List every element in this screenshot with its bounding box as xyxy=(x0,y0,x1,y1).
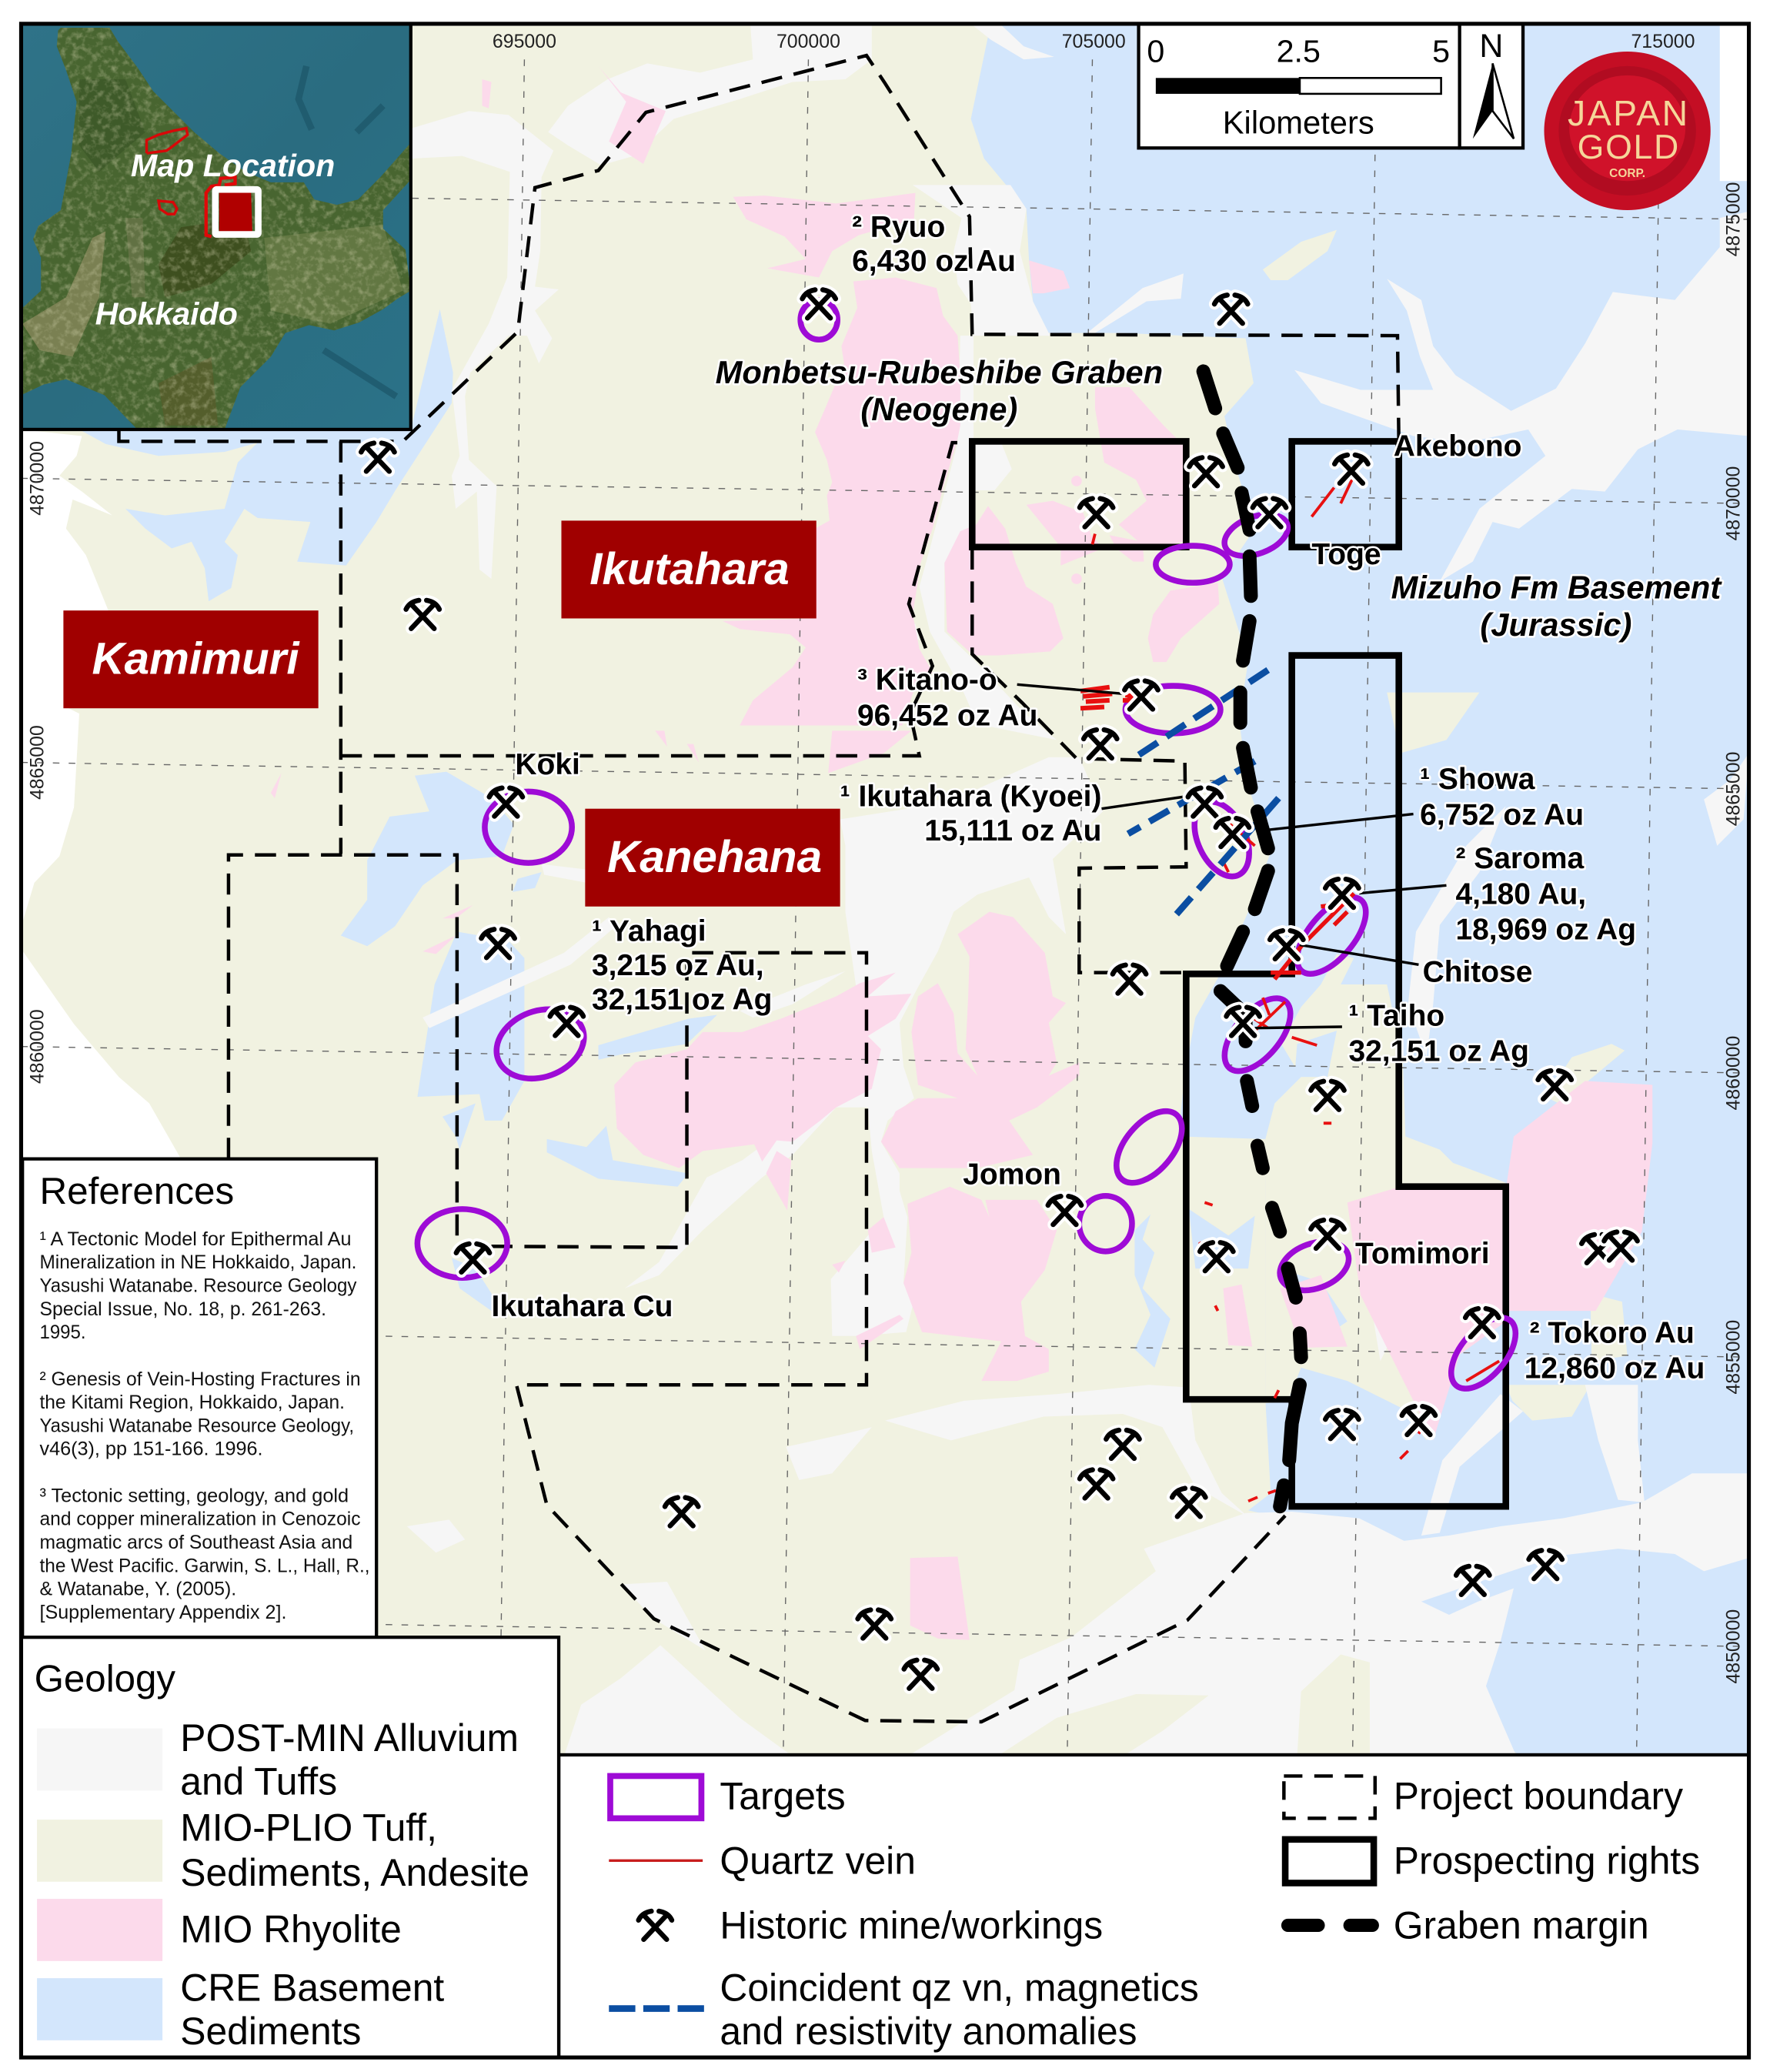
prospect labels: 32,151 oz Ag xyxy=(1348,1035,1529,1068)
grid coordinate labels: 4860000 xyxy=(27,1009,48,1084)
north arrow xyxy=(1460,24,1523,148)
panel: references: the West Pacific. Garwin, S. L., Hall, R., xyxy=(39,1555,370,1576)
geological unit labels: Monbetsu-Rubeshibe Graben xyxy=(716,354,1163,390)
panel: references: Special Issue, No. 18, p. 261-263. xyxy=(39,1298,326,1320)
panel: references: [Supplementary Appendix 2]. xyxy=(39,1602,286,1623)
panel: symbol legend: Graben margin xyxy=(1394,1904,1649,1947)
panel: references: Yasushi Watanabe. Resource Geology xyxy=(39,1275,357,1297)
scale bar: 2.5 xyxy=(1277,34,1321,69)
basement sediments northwest xyxy=(79,309,453,601)
region name: Kamimuri xyxy=(63,610,319,708)
prospect labels: 3,215 oz Au, xyxy=(592,949,764,982)
panel: references: 1995. xyxy=(39,1322,86,1343)
geological unit labels: Mizuho Fm Basement xyxy=(1391,570,1722,606)
grid coordinate labels: 4870000 xyxy=(27,441,48,516)
panel: references xyxy=(22,1159,376,1640)
prospect labels: Ikutahara Cu xyxy=(492,1290,673,1323)
prospect labels: ¹ Yahagi xyxy=(592,914,706,947)
panel: references: ³ Tectonic setting, geology, and gold xyxy=(39,1485,349,1507)
alluvium and tuffs xyxy=(407,24,1749,1756)
panel: symbol legend: Project boundary xyxy=(1394,1774,1683,1817)
prospect labels: ² Saroma xyxy=(1455,842,1585,875)
grid coordinate labels: 4870000 xyxy=(1723,466,1745,541)
panel: symbol legend: Prospecting rights xyxy=(1394,1839,1700,1882)
prospect labels: 15,111 oz Au xyxy=(924,814,1101,847)
coincident anomalies xyxy=(1128,670,1278,920)
prospect labels: 12,860 oz Au xyxy=(1525,1352,1705,1385)
rhyolite xyxy=(271,66,1652,1640)
beige islands over basement xyxy=(1263,229,1627,1441)
panel: geology legend: Sediments, Andesite xyxy=(180,1851,529,1894)
panel: symbol legend: Quartz vein xyxy=(720,1839,916,1882)
panel: symbol legend xyxy=(559,1755,1749,2057)
prospect labels: Toge xyxy=(1311,538,1381,571)
panel: references: & Watanabe, Y. (2005). xyxy=(39,1579,236,1600)
prospect labels: 6,752 oz Au xyxy=(1420,798,1584,831)
scale bar: 0 xyxy=(1147,34,1164,69)
grid coordinate labels: 4855000 xyxy=(1723,1320,1745,1395)
panel: references: and copper mineralization in Cenozoic xyxy=(39,1509,361,1530)
panel: references: Yasushi Watanabe Resource Geology, xyxy=(39,1415,354,1437)
leader lines xyxy=(1017,684,1446,1028)
inset map: Hokkaido location: Hokkaido xyxy=(95,296,238,331)
panel: symbol legend: and resistivity anomalies xyxy=(720,2010,1137,2053)
logo: Japan Gold xyxy=(1544,52,1711,210)
scale bar: 5 xyxy=(1432,34,1450,69)
prospect labels: ¹ Showa xyxy=(1420,763,1535,796)
grid coordinate labels: 700000 xyxy=(776,31,840,52)
prospect labels: 32,151 oz Ag xyxy=(592,984,772,1017)
panel: geology legend: Sediments xyxy=(180,2010,361,2053)
panel: symbol legend: Historic mine/workings xyxy=(720,1904,1103,1947)
panel: geology legend: CRE Basement xyxy=(180,1966,444,2009)
graben margin xyxy=(1204,371,1301,1506)
region name: Kamimuri: Kamimuri xyxy=(92,634,300,684)
panel: references: References xyxy=(39,1170,234,1212)
geological unit labels: (Jurassic) xyxy=(1480,607,1631,643)
panel: references: magmatic arcs of Southeast Asia and xyxy=(39,1532,352,1553)
geological unit labels xyxy=(716,354,1722,643)
region name: Kanehana xyxy=(585,809,840,907)
grid coordinate labels: 4865000 xyxy=(27,725,48,800)
panel: geology legend: Geology xyxy=(35,1658,175,1700)
prospect labels: 18,969 oz Ag xyxy=(1455,914,1636,947)
prospect labels: ¹ Taiho xyxy=(1348,999,1444,1032)
grid coordinate labels: 4850000 xyxy=(1723,1609,1745,1684)
prospect labels: ³ Kitano-ò xyxy=(857,663,997,697)
north arrow: N xyxy=(1479,28,1503,65)
historic mines xyxy=(361,290,1638,1689)
panel: references: v46(3), pp 151-166. 1996. xyxy=(39,1439,263,1460)
grid coordinate labels: 695000 xyxy=(493,31,556,52)
panel: references: Mineralization in NE Hokkaido, Japan. xyxy=(39,1252,356,1273)
panel: geology legend: POST-MIN Alluvium xyxy=(180,1716,519,1760)
inset map: Hokkaido location: Map Location xyxy=(131,148,335,183)
white coast west xyxy=(21,429,181,1159)
scale bar xyxy=(1139,24,1460,148)
prospecting rights xyxy=(972,441,1506,1506)
panel: geology legend: MIO-PLIO Tuff, xyxy=(180,1806,437,1850)
region name: Ikutahara xyxy=(561,520,817,618)
panel: symbol legend: Coincident qz vn, magnetics xyxy=(720,1966,1199,2009)
region name: Kanehana: Kanehana xyxy=(607,832,822,882)
project boundaries xyxy=(119,55,1399,1722)
panel: geology legend: and Tuffs xyxy=(180,1760,337,1803)
geological unit labels: (Neogene) xyxy=(860,391,1017,427)
logo: Japan Gold: JAPAN xyxy=(1568,93,1690,133)
prospect labels: ¹ Ikutahara (Kyoei) xyxy=(840,780,1101,813)
prospect labels xyxy=(492,210,1705,1385)
prospect labels: Koki xyxy=(515,748,580,781)
region name: Ikutahara: Ikutahara xyxy=(589,544,790,594)
basement sediments west xyxy=(341,772,1171,1368)
panel: geology legend: MIO Rhyolite xyxy=(180,1908,402,1951)
grid coordinate labels xyxy=(27,31,1745,1684)
prospect labels: 6,430 oz Au xyxy=(852,245,1016,278)
grid coordinate labels: 705000 xyxy=(1062,31,1126,52)
grid coordinate labels: 715000 xyxy=(1631,31,1695,52)
logo: Japan Gold: GOLD xyxy=(1578,129,1680,166)
panel: references: ² Genesis of Vein-Hosting Fractures in xyxy=(39,1369,361,1390)
panel: references: ¹ A Tectonic Model for Epithermal Au xyxy=(39,1228,352,1250)
panel: symbol legend: Targets xyxy=(720,1774,846,1817)
prospect labels: 4,180 Au, xyxy=(1455,877,1586,911)
panel: geology legend xyxy=(21,1637,559,2057)
inset map: Hokkaido location xyxy=(21,24,411,429)
prospect labels: Akebono xyxy=(1394,429,1521,463)
inset location box xyxy=(215,189,259,235)
prospect labels: Jomon xyxy=(963,1158,1061,1191)
prospect labels: ² Tokoro Au xyxy=(1530,1316,1695,1349)
scale bar: Kilometers xyxy=(1223,104,1374,140)
grid coordinate labels: 4860000 xyxy=(1723,1036,1745,1110)
targets xyxy=(417,300,1528,1400)
basement sediments east xyxy=(971,24,1749,1753)
prospect labels: ² Ryuo xyxy=(852,210,945,243)
basement fragments xyxy=(1189,1031,1348,1348)
grid coordinate labels: 4865000 xyxy=(1723,752,1745,826)
coordinate grid xyxy=(21,59,1749,1753)
logo: Japan Gold: CORP. xyxy=(1609,167,1645,180)
grid coordinate labels: 4875000 xyxy=(1723,182,1745,256)
quartz veins xyxy=(1080,455,1499,1501)
panel: references: the Kitami Region, Hokkaido, Japan. xyxy=(39,1392,345,1413)
prospect labels: Tomimori xyxy=(1355,1237,1490,1270)
prospect labels: Chitose xyxy=(1423,956,1532,989)
prospect labels: 96,452 oz Au xyxy=(857,700,1037,733)
